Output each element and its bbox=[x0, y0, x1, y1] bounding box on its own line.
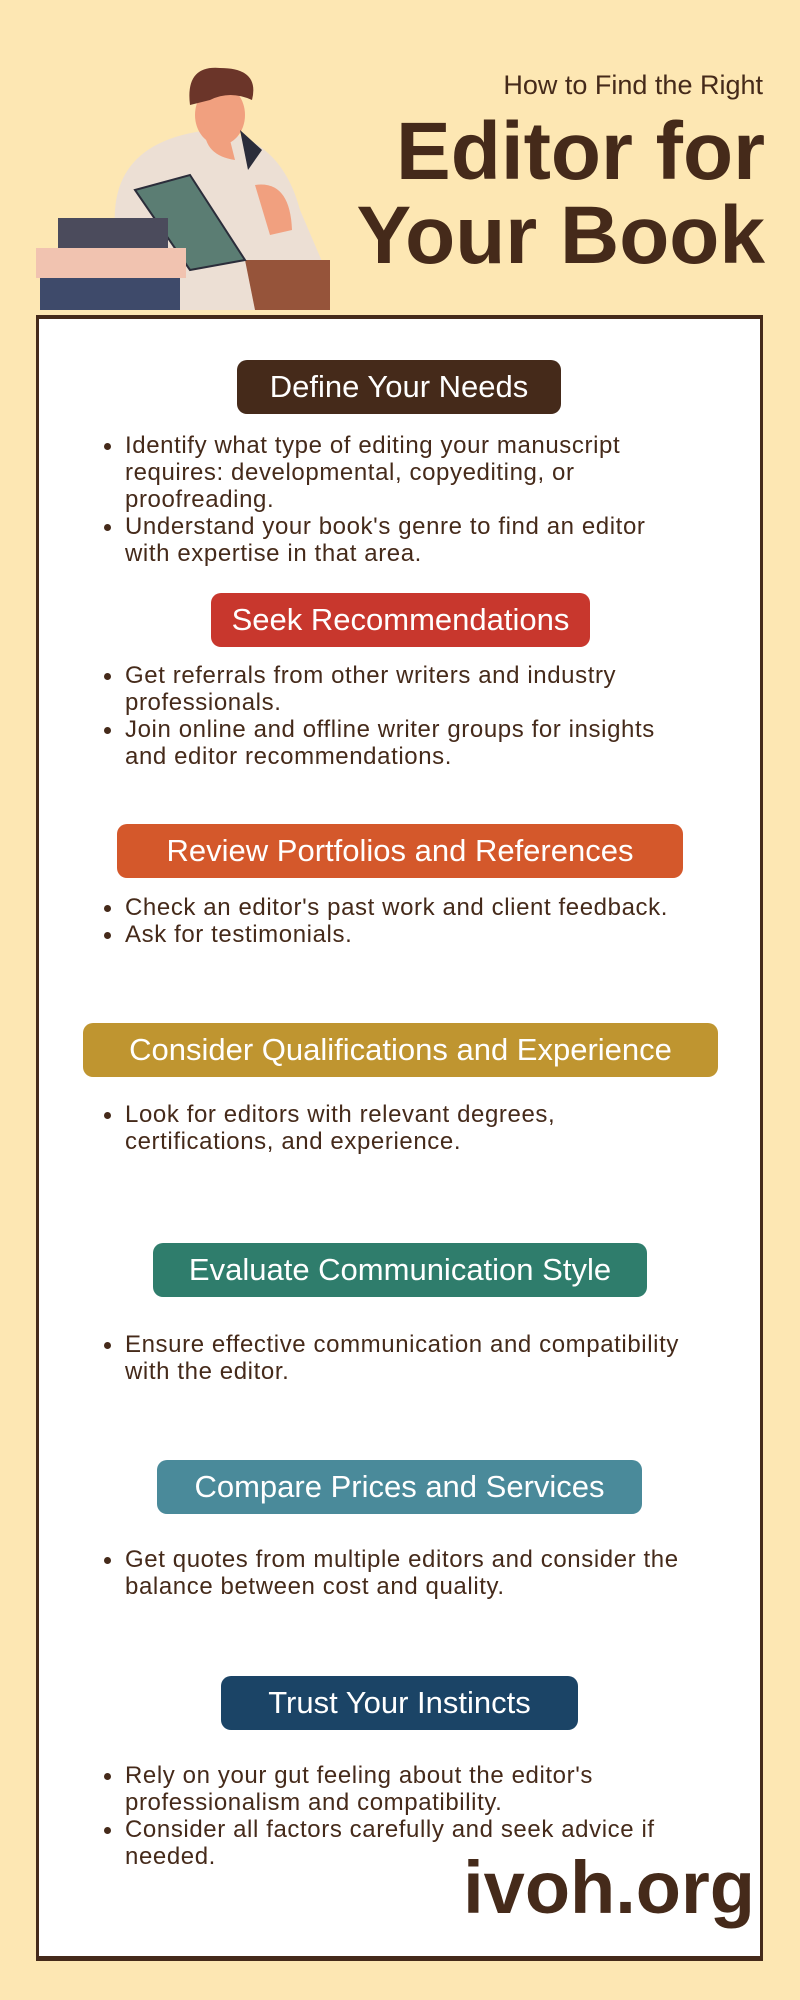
list: seek: Get referrals from other writers and industry bbox=[125, 662, 616, 689]
heading: trust bbox=[221, 1676, 578, 1730]
list: compare bbox=[104, 1546, 679, 1600]
list: consider: certifications, and experience. bbox=[125, 1128, 461, 1155]
list: compare: Get quotes from multiple editors and consider the bbox=[125, 1546, 679, 1573]
heading: review bbox=[117, 824, 683, 878]
title bbox=[357, 106, 765, 281]
list: seek: and editor recommendations. bbox=[125, 743, 452, 770]
list: seek: professionals. bbox=[125, 689, 281, 716]
heading: define: Define Your Needs bbox=[270, 369, 528, 404]
list: review: Ask for testimonials. bbox=[125, 921, 352, 948]
heading: compare bbox=[157, 1460, 642, 1514]
list: seek bbox=[104, 662, 655, 770]
heading: seek: Seek Recommendations bbox=[232, 602, 569, 637]
subtitle: How to Find the Right bbox=[503, 70, 763, 100]
list: review: Check an editor's past work and client feedback. bbox=[125, 894, 668, 921]
list: define: proofreading. bbox=[125, 486, 274, 513]
heading: evaluate: Evaluate Communication Style bbox=[189, 1252, 611, 1287]
list: define: Understand your book's genre to find an editor bbox=[125, 513, 646, 540]
heading: seek bbox=[211, 593, 590, 647]
panel: content bbox=[36, 315, 763, 1961]
list: review bbox=[104, 894, 668, 948]
list: trust: Consider all factors carefully and seek advice if bbox=[125, 1816, 655, 1843]
list: consider bbox=[104, 1101, 555, 1155]
logo text: ivoh.org bbox=[463, 1846, 755, 1929]
list: seek: Join online and offline writer groups for insights bbox=[125, 716, 655, 743]
heading: define bbox=[237, 360, 561, 414]
heading: evaluate bbox=[153, 1243, 647, 1297]
list: define: Identify what type of editing your manuscript bbox=[125, 432, 620, 459]
list: evaluate: with the editor. bbox=[125, 1358, 289, 1385]
title: Editor for bbox=[396, 106, 765, 197]
heading: consider: Consider Qualifications and Experience bbox=[129, 1032, 672, 1067]
heading: consider bbox=[83, 1023, 718, 1077]
title: Your Book bbox=[357, 190, 765, 281]
list: consider: Look for editors with relevant degrees, bbox=[125, 1101, 555, 1128]
heading: trust: Trust Your Instincts bbox=[268, 1685, 531, 1720]
list: compare: balance between cost and quality. bbox=[125, 1573, 505, 1600]
illustration: man reading book bbox=[36, 68, 330, 310]
list: define bbox=[104, 432, 646, 567]
heading: compare: Compare Prices and Services bbox=[194, 1469, 605, 1504]
list: trust: professionalism and compatibility. bbox=[125, 1789, 502, 1816]
list: define: with expertise in that area. bbox=[125, 540, 422, 567]
list: trust: Rely on your gut feeling about the editor's bbox=[125, 1762, 593, 1789]
list: evaluate: Ensure effective communication and compatibility bbox=[125, 1331, 679, 1358]
heading: review: Review Portfolios and References bbox=[167, 833, 633, 868]
list: evaluate bbox=[104, 1331, 679, 1385]
list: trust: needed. bbox=[125, 1843, 216, 1870]
list: trust bbox=[104, 1762, 655, 1870]
list: define: requires: developmental, copyediting, or bbox=[125, 459, 575, 486]
